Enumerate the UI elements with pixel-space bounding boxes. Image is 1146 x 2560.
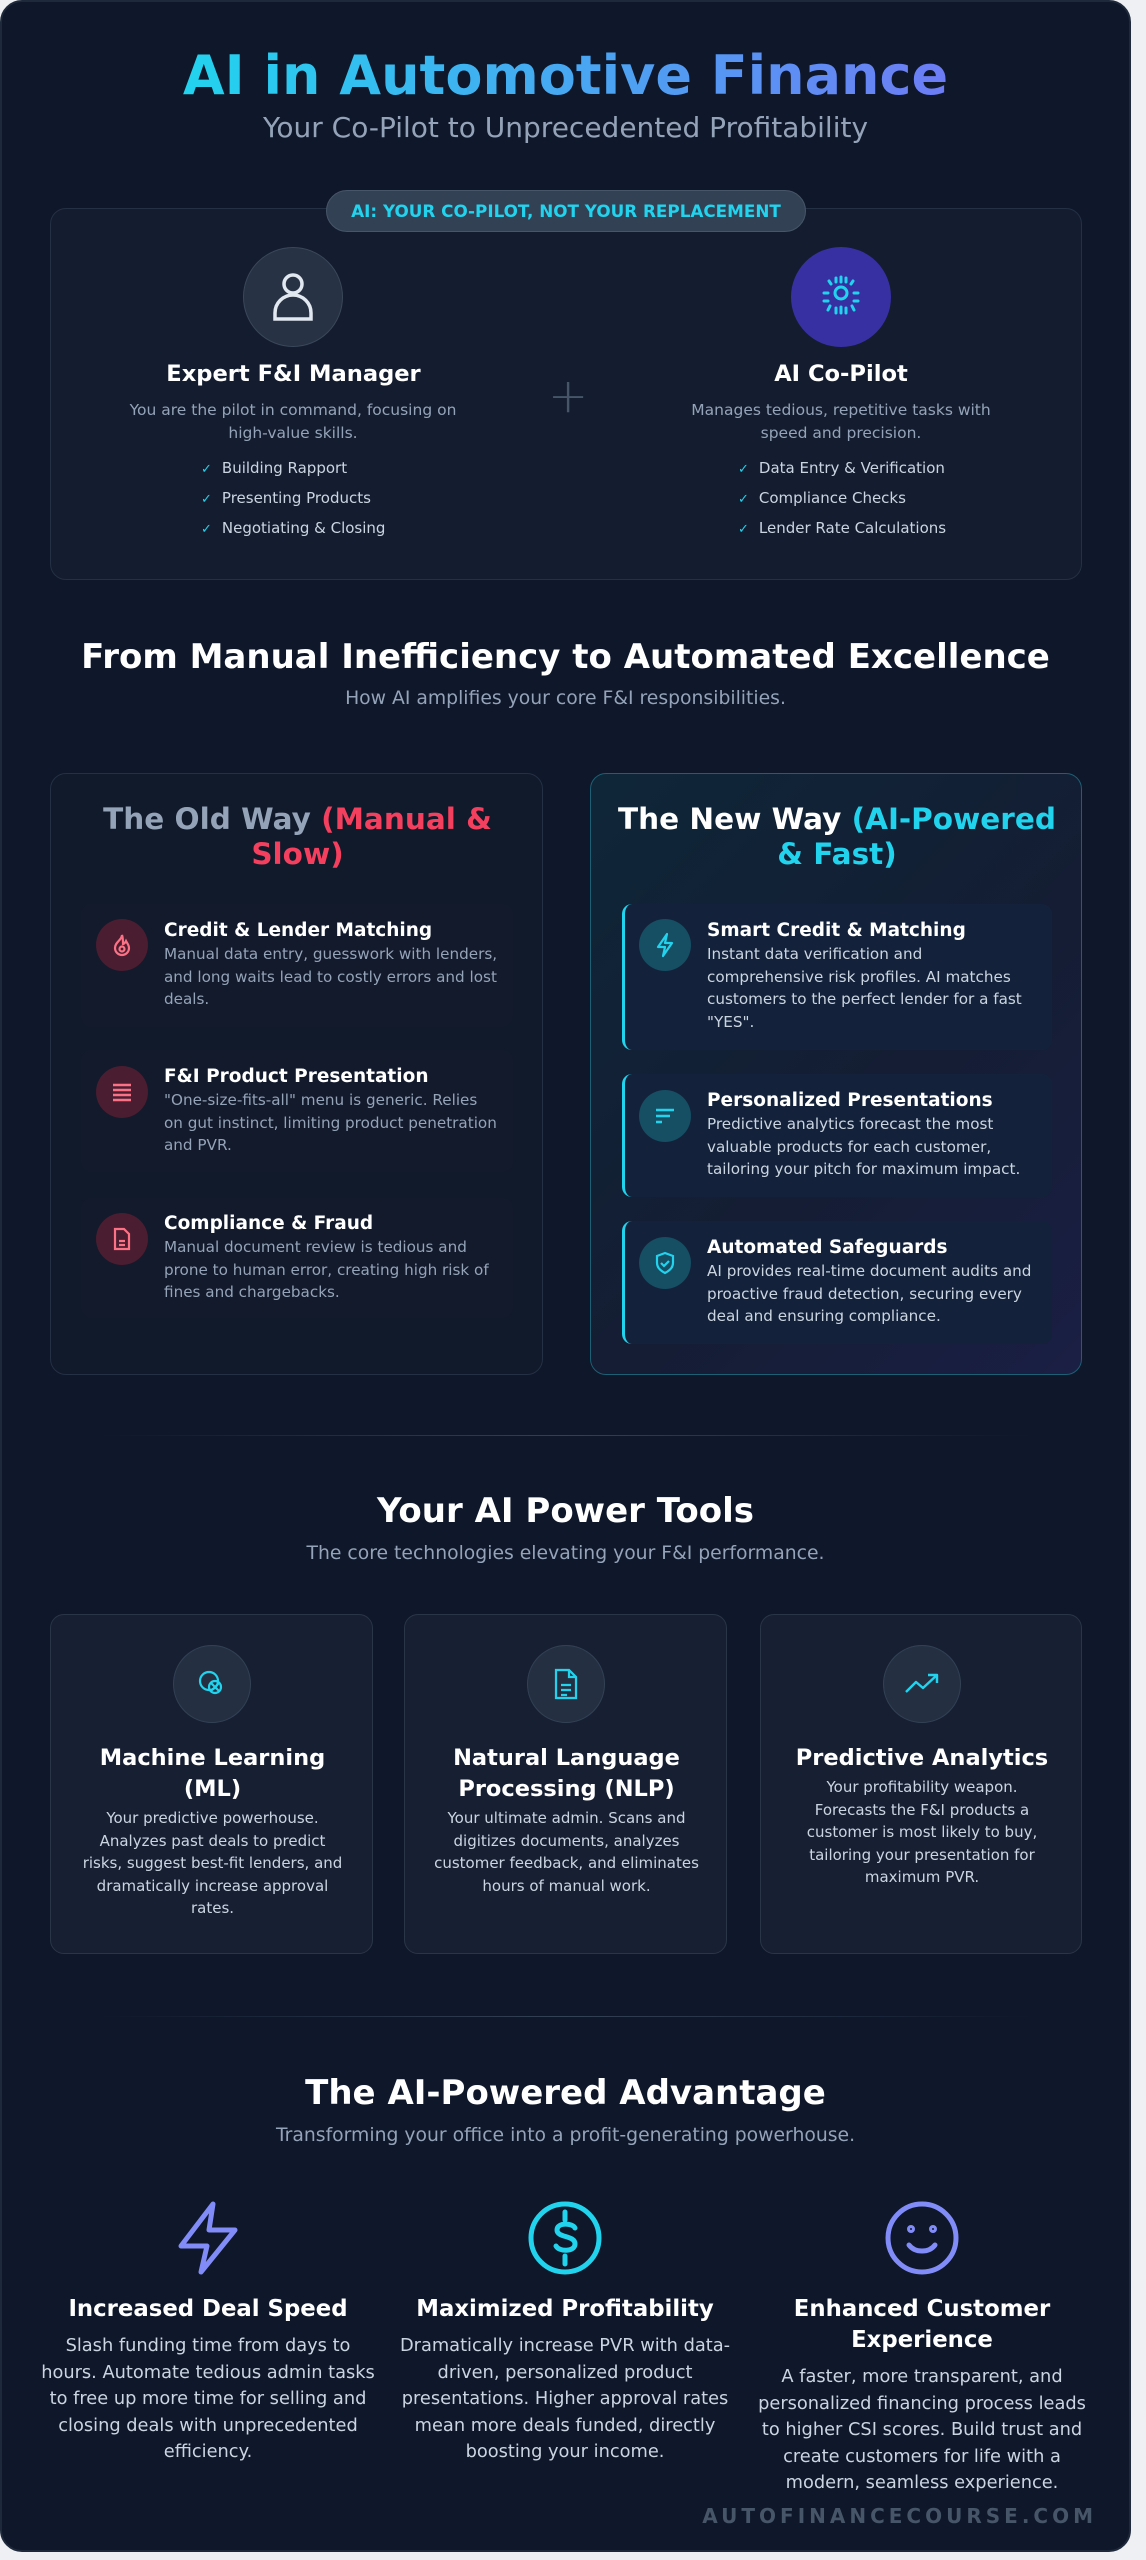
item: safeguards: Automated Safeguards xyxy=(707,1237,948,1258)
list: ai tasks xyxy=(738,459,946,537)
item: product manual xyxy=(81,1050,513,1172)
card: nlp: Natural Language Processing (NLP) xyxy=(453,1745,680,1802)
icon: shield xyxy=(639,1237,691,1289)
icon: trend xyxy=(883,1645,961,1723)
card: predictive: Predictive Analytics xyxy=(796,1745,1048,1771)
item: smart credit xyxy=(622,904,1052,1050)
title: AI in Automotive Finance xyxy=(183,44,948,107)
card: nlp: Your ultimate admin. Scans and digitizes documents, analyzes customer feedback, and eliminates hours of manual work. xyxy=(434,1809,699,1895)
panel: old way xyxy=(50,773,543,1375)
item: product manual: "One-size-fits-all" menu is generic. Relies on gut instinct, limiting product penetration and PVR. xyxy=(164,1091,497,1154)
icon: ai xyxy=(791,247,891,347)
pill label: AI: YOUR CO-PILOT, NOT YOUR REPLACEMENT xyxy=(351,201,781,221)
card: predictive: Your profitability weapon. Forecasts the F&I products a customer is most likely to buy, tailoring your presentation for maximum PVR. xyxy=(807,1778,1037,1886)
heading: new way: The New Way (AI-Powered & Fast) xyxy=(618,802,1056,871)
item: safeguards: AI provides real-time document audits and proactive fraud detection, securing every deal and ensuring compliance. xyxy=(707,1262,1031,1325)
icon: fire xyxy=(96,919,148,971)
item: personalized xyxy=(622,1074,1052,1197)
footer: brand: AUTOFINANCECOURSE.COM xyxy=(702,2504,1097,2528)
advantage: experience: Enhanced Customer Experience xyxy=(794,2296,1050,2353)
icon: list xyxy=(96,1066,148,1118)
card: predictive xyxy=(760,1614,1082,1954)
icon: plus: + xyxy=(548,368,588,424)
icon: dollar xyxy=(528,2202,602,2274)
panel: co-pilot xyxy=(50,208,1082,580)
heading: old way: The Old Way (Manual & Slow) xyxy=(103,802,492,871)
icon: person xyxy=(243,247,343,347)
item: compliance manual: Manual document review is tedious and prone to human error, creating high risk of fines and chargebacks. xyxy=(164,1238,489,1301)
list: human skills: ✓ Building Rapport xyxy=(201,459,347,477)
text: expert desc: You are the pilot in command, focusing on high-value skills. xyxy=(130,401,456,442)
subtitle: section 2: How AI amplifies your core F&I responsibilities. xyxy=(345,688,786,709)
item: credit manual xyxy=(81,904,513,1027)
advantage: profit xyxy=(400,2202,730,2462)
icon: ml xyxy=(173,1645,251,1723)
card: machine learning: Machine Learning (ML) xyxy=(100,1745,325,1802)
heading: power tools: Your AI Power Tools xyxy=(377,1491,754,1531)
advantage: speed: Increased Deal Speed xyxy=(68,2296,348,2322)
icon: document xyxy=(527,1645,605,1723)
card: machine learning: Your predictive powerhouse. Analyzes past deals to predict risks, suggest best-fit lenders, and dramatically increase approval rates. xyxy=(83,1809,342,1917)
item: personalized: Predictive analytics forecast the most valuable products for each customer, tailoring your pitch for maximum impact. xyxy=(707,1115,1020,1178)
heading: advantage: The AI-Powered Advantage xyxy=(305,2073,826,2113)
advantage: experience xyxy=(758,2202,1086,2493)
heading: ai co-pilot: AI Co-Pilot xyxy=(774,361,908,387)
panel: new way xyxy=(590,773,1082,1375)
icon: bolt xyxy=(639,919,691,971)
heading: expert: Expert F&I Manager xyxy=(166,361,421,387)
advantage: profit: Maximized Profitability xyxy=(416,2296,714,2322)
list: human skills: ✓ Presenting Products xyxy=(201,489,371,507)
subtitle: Your Co-Pilot to Unprecedented Profitability xyxy=(263,111,868,144)
advantage: experience: A faster, more transparent, and personalized financing process leads to higher CSI scores. Build trust and create customers for life with a modern, seamless experience. xyxy=(758,2366,1086,2493)
list: ai tasks: ✓ Lender Rate Calculations xyxy=(738,519,946,537)
item: product manual: F&I Product Presentation xyxy=(164,1066,429,1087)
item: personalized: Personalized Presentations xyxy=(707,1090,993,1111)
advantage: speed: Slash funding time from days to hours. Automate tedious admin tasks to free up more time for selling and closing deals with unprecedented efficiency. xyxy=(41,2335,375,2462)
advantage: profit: Dramatically increase PVR with data-driven, personalized product presentations. Higher approval rates mean more deals funded, directly boosting your income. xyxy=(400,2335,730,2462)
subtitle: section 3: The core technologies elevating your F&I performance. xyxy=(306,1543,824,1564)
item: credit manual: Manual data entry, guesswork with lenders, and long waits lead to costly errors and lost deals. xyxy=(164,945,497,1008)
card: machine learning xyxy=(50,1614,373,1954)
heading: manual to automated: From Manual Inefficiency to Automated Excellence xyxy=(81,637,1050,677)
list: ai tasks: ✓ Compliance Checks xyxy=(738,489,906,507)
item: credit manual: Credit & Lender Matching xyxy=(164,920,432,941)
pill label xyxy=(326,190,806,232)
subtitle: section 4: Transforming your office into a profit-generating powerhouse. xyxy=(276,2125,855,2146)
advantage: speed xyxy=(41,2202,375,2462)
item: smart credit: Smart Credit & Matching xyxy=(707,920,966,941)
text: ai desc: Manages tedious, repetitive tasks with speed and precision. xyxy=(691,401,991,442)
item: compliance manual xyxy=(81,1198,513,1318)
list: human skills xyxy=(201,459,385,537)
list: ai tasks: ✓ Data Entry & Verification xyxy=(738,459,945,477)
list: human skills: ✓ Negotiating & Closing xyxy=(201,519,385,537)
item: safeguards xyxy=(622,1221,1052,1344)
icon: lines xyxy=(639,1090,691,1142)
item: compliance manual: Compliance & Fraud xyxy=(164,1213,373,1234)
icon: document xyxy=(96,1213,148,1265)
icon: smile xyxy=(886,2202,958,2274)
item: smart credit: Instant data verification and comprehensive risk profiles. AI matches customers to the perfect lender for a fast "YES". xyxy=(707,945,1022,1031)
icon: bolt xyxy=(178,2202,238,2274)
card: nlp xyxy=(404,1614,727,1954)
